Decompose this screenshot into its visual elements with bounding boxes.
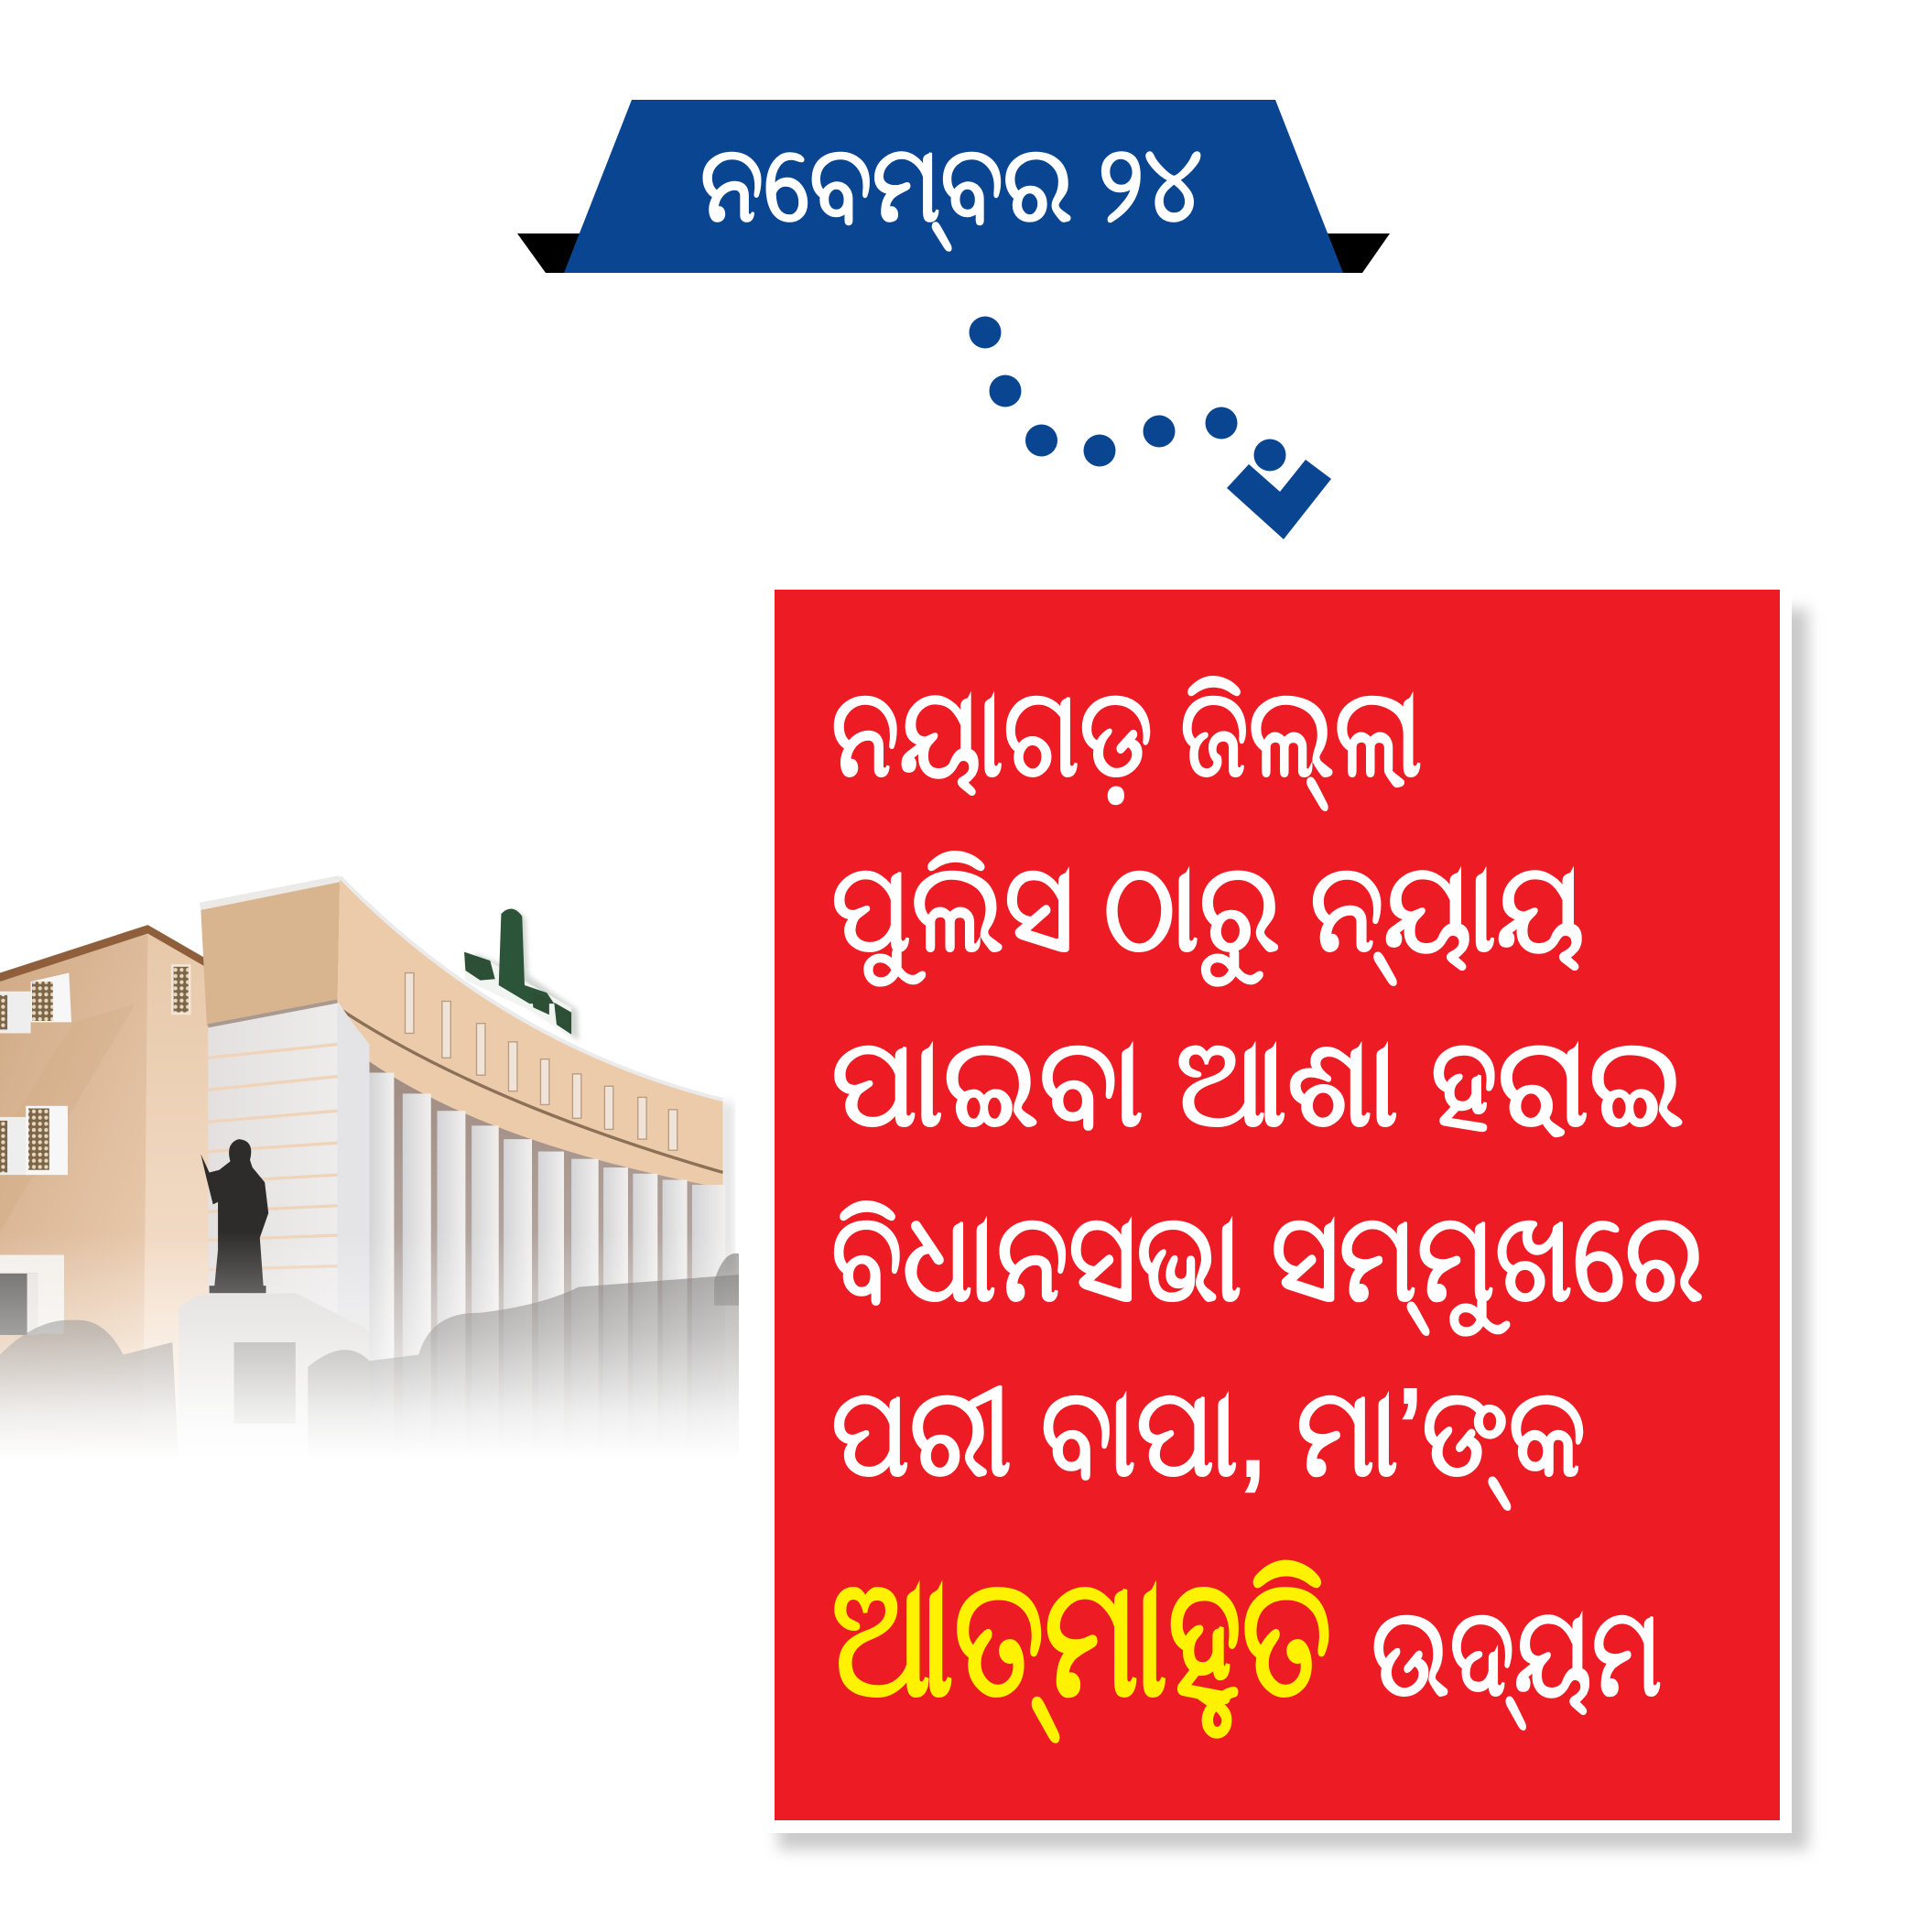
front tower — [201, 878, 340, 1026]
headline line 5: ପରୀ ବାପା, ମା’ଙ୍କ — [831, 1363, 1586, 1509]
lower facade band — [338, 1007, 723, 1172]
headline line 1: ନୟାଗଡ଼ ଜିଲ୍ଲା — [831, 663, 1423, 809]
text card — [763, 578, 1792, 1833]
curved facade — [338, 878, 723, 1189]
left wing wall — [0, 929, 211, 1460]
headline line 6: last word: ଉଦ୍ୟମ — [1371, 1583, 1662, 1729]
emblem on roof — [463, 909, 579, 1041]
headline line 2: ପୁଲିସ ଠାରୁ ନ୍ୟାୟ — [831, 839, 1585, 984]
statue — [201, 1139, 268, 1288]
colonnade — [370, 1061, 725, 1460]
building illustration — [0, 875, 742, 1473]
text card shadow — [778, 609, 1808, 1850]
banner text: date: ନବେମ୍ବର ୨୪ — [700, 125, 1202, 250]
date banner — [564, 100, 1343, 273]
headline line 6: highlighted word: ଆତ୍ମାହୁତି — [831, 1546, 1332, 1741]
fade to white — [0, 1232, 742, 1473]
headline line 4: ବିଧାନସଭା ସମ୍ମୁଖରେ — [831, 1189, 1704, 1335]
striped block — [208, 1001, 370, 1460]
soft shadow behind right edge — [719, 1102, 734, 1275]
headline line 3: ପାଇବା ଆଶା ହରାଇ — [831, 1014, 1685, 1152]
dotted arrow — [969, 317, 1331, 539]
wall windows — [0, 965, 190, 1335]
plinth and shrubs — [0, 1254, 739, 1460]
ribbon: black folds — [517, 233, 1390, 273]
facade vents — [406, 973, 678, 1150]
